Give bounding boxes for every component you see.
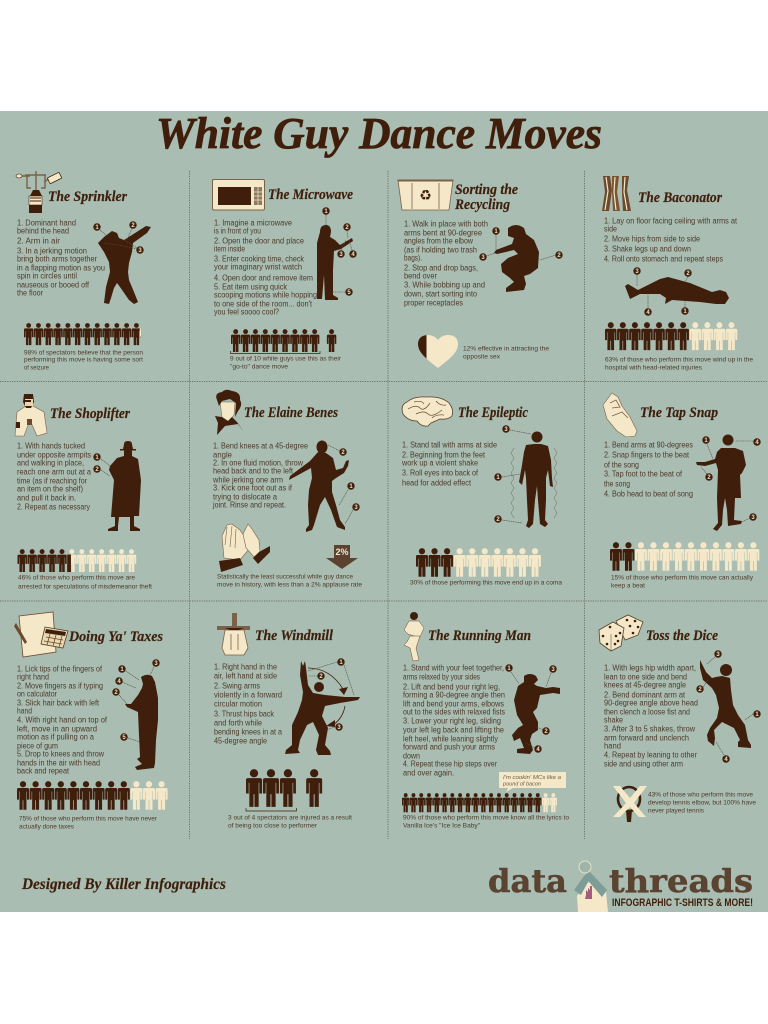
figure: sprinkler dancer: 2 bbox=[131, 223, 135, 229]
steps: lean to one side and bend bbox=[604, 672, 687, 682]
steps: is in front of you bbox=[214, 226, 261, 236]
panel: the running man bbox=[402, 612, 569, 830]
figure: running dancer: 3 bbox=[551, 667, 555, 673]
figure: elaine dancer: 2 bbox=[341, 450, 345, 456]
steps bbox=[214, 218, 317, 316]
panel: the elaine benes bbox=[212, 390, 362, 588]
icon: elaine portrait bbox=[215, 390, 244, 435]
stat text: "go-to" dance move bbox=[230, 364, 288, 370]
stat text: of seizure bbox=[24, 364, 49, 372]
stat text: 30% of those performing this move end up in a coma bbox=[410, 580, 562, 586]
figure: taxes dancer: 3 bbox=[154, 661, 158, 667]
steps: 1. Dominant hand bbox=[17, 218, 76, 228]
steps: head for added effect bbox=[402, 478, 472, 488]
stat text: hospital with head-related injuries bbox=[605, 364, 703, 372]
steps: (as if holding two trash bbox=[404, 246, 477, 254]
title: White Guy Dance Moves bbox=[156, 109, 602, 158]
figure: lying dancer: 3 bbox=[635, 269, 639, 275]
stat text: 63% of those who perform this move wind up in the bbox=[605, 356, 753, 364]
figure: squatting dancer: 2 bbox=[557, 253, 561, 259]
figure: shaking dancer: 1 bbox=[496, 475, 500, 481]
heading: The Sprinkler bbox=[48, 189, 127, 205]
steps: 1. Walk in place with both bbox=[404, 220, 488, 228]
panel: the tap snap bbox=[603, 393, 761, 590]
heading: The Epileptic bbox=[458, 405, 528, 421]
stat text: 9 out of 10 white guys use this as their bbox=[230, 356, 342, 362]
heading: The Elaine Benes bbox=[244, 405, 338, 421]
figure: tap snap dancer: 2 bbox=[707, 475, 711, 481]
heading: The Shoplifter bbox=[50, 406, 130, 422]
steps: left, move in an upward bbox=[17, 724, 97, 734]
speech bubble: I'm cookin' MCs like a bbox=[503, 775, 562, 781]
steps bbox=[404, 220, 488, 308]
steps: the floor bbox=[17, 288, 43, 298]
steps: 2. Bend dominant arm at bbox=[604, 690, 686, 700]
figure: windmill dancer: 2 bbox=[319, 674, 323, 680]
figure: taxes dancer: 5 bbox=[122, 735, 126, 741]
steps: on calculator bbox=[17, 690, 57, 698]
figure: microwave dancer: 5 bbox=[347, 290, 351, 296]
figure: squatting dancer: 1 bbox=[494, 229, 498, 235]
figure: squatting dancer bbox=[479, 225, 563, 292]
steps: 2. Lift and bend your right leg, bbox=[403, 682, 500, 692]
steps: 1. With hands tucked bbox=[17, 442, 85, 450]
figure: sprinkler dancer bbox=[93, 221, 151, 304]
icon: bacon bbox=[602, 176, 631, 211]
steps: 3. Enter cooking time, check bbox=[214, 254, 305, 264]
steps: and pull it back in. bbox=[17, 494, 76, 502]
figure: microwave dancer bbox=[317, 207, 357, 300]
figure: sprinkler dancer: 3 bbox=[138, 248, 142, 254]
icon: running man bbox=[404, 612, 424, 661]
pictogram: 98 percent bbox=[24, 323, 141, 345]
steps: 3. In a jerking motion bbox=[17, 246, 87, 256]
figure: running dancer bbox=[505, 664, 560, 754]
steps: angles from the elbow bbox=[404, 236, 473, 246]
steps: 2. In one fluid motion, throw bbox=[213, 458, 303, 468]
steps: hand bbox=[17, 706, 32, 716]
steps: 5. Drop to knees and throw bbox=[17, 750, 104, 758]
steps: knees at 45-degree angle bbox=[604, 680, 686, 690]
steps: 2. Repeat as necessary bbox=[17, 502, 90, 512]
stat text bbox=[217, 574, 362, 588]
steps bbox=[214, 662, 282, 746]
icon: tax papers and calculator bbox=[14, 612, 68, 657]
figure: tap snap dancer: 3 bbox=[751, 515, 755, 521]
grid dividers bbox=[0, 171, 768, 839]
figure: tap snap dancer bbox=[696, 434, 761, 531]
steps: the song bbox=[604, 480, 630, 488]
steps: 2. Move hips from side to side bbox=[604, 234, 700, 244]
figure: lying dancer: 4 bbox=[646, 310, 650, 316]
steps: arms relaxed by your sides bbox=[403, 672, 480, 682]
steps: you feel soooo cool? bbox=[214, 308, 279, 316]
figure: taxes dancer: 2 bbox=[114, 690, 118, 696]
stat text: 98% of spectators believe that the person bbox=[24, 350, 143, 356]
steps: 4. With right hand on top of bbox=[17, 716, 108, 724]
steps: shake bbox=[604, 716, 623, 724]
steps: piece of gum bbox=[17, 742, 58, 750]
figure: elaine dancer: 3 bbox=[354, 505, 358, 511]
steps: 3. After 3 to 5 shakes, throw bbox=[604, 724, 695, 734]
stat text: develop tennis elbow, but 100% have bbox=[648, 800, 756, 806]
figure: dice dancer: 1 bbox=[755, 712, 759, 718]
stat text: 15% of those who perform this move can actually bbox=[611, 574, 754, 582]
figure: running dancer: 1 bbox=[507, 666, 511, 672]
steps: 1. Stand tall with arms at side bbox=[402, 440, 497, 450]
panel: the epileptic bbox=[401, 397, 562, 586]
stat text bbox=[19, 816, 158, 830]
stat text bbox=[230, 356, 342, 370]
steps: 1. Bend arms at 90-degrees bbox=[604, 440, 693, 450]
speech bubble bbox=[499, 772, 566, 792]
heading: The Running Man bbox=[428, 628, 531, 644]
icon: brain bbox=[402, 397, 453, 426]
figure: elaine dancer: 1 bbox=[349, 484, 353, 490]
pictogram: 46 percent bbox=[18, 549, 136, 572]
heading: Toss the Dice bbox=[646, 628, 718, 644]
figure: trench coat dancer: 1 bbox=[95, 455, 99, 461]
footer credit: Designed By Killer Infographics bbox=[21, 876, 226, 893]
stat text bbox=[403, 814, 569, 830]
steps: time (as if reaching for bbox=[17, 476, 87, 486]
stat text: keep a beat bbox=[611, 582, 645, 590]
pictogram: 15 percent bbox=[610, 542, 759, 571]
figure: taxes dancer: 4 bbox=[117, 679, 121, 685]
steps: 1. Imagine a microwave bbox=[214, 218, 293, 228]
stat text bbox=[605, 356, 753, 372]
stat text: performing this move is having some sort bbox=[24, 356, 143, 364]
steps: 4. Repeat these hip steps over bbox=[403, 760, 497, 768]
steps: joint. Rinse and repeat. bbox=[212, 500, 286, 510]
steps: hand bbox=[604, 742, 621, 750]
figure: tap snap dancer: 4 bbox=[755, 440, 759, 446]
panel: the windmill bbox=[214, 613, 360, 830]
steps: then clench a loose fist and bbox=[604, 708, 690, 716]
steps: 2. Beginning from the feet bbox=[402, 450, 486, 460]
heading: The Tap Snap bbox=[640, 405, 718, 421]
figure: squatting dancer: 3 bbox=[481, 255, 485, 261]
steps: proper receptacles bbox=[404, 298, 463, 308]
steps: arms bent at 90-degree bbox=[404, 228, 483, 238]
figure: dice dancer: 2 bbox=[698, 687, 702, 693]
icon: clapping hands bbox=[219, 524, 270, 572]
steps: in a flapping motion as you bbox=[17, 264, 105, 272]
steps: spin in circles until bbox=[17, 272, 77, 280]
stat text: 46% of those who perform this move are bbox=[18, 574, 135, 582]
steps bbox=[401, 440, 497, 488]
steps: 4. Open door and remove item bbox=[214, 274, 313, 282]
logo word: data: data bbox=[488, 862, 567, 900]
steps: side bbox=[604, 224, 617, 234]
steps: your imaginary wrist watch bbox=[214, 262, 302, 272]
heading: The Windmill bbox=[255, 628, 334, 644]
stat text: 75% of those who perform this move have never bbox=[19, 816, 158, 822]
steps: 2. Swing arms bbox=[214, 682, 260, 690]
steps: side and using other arm bbox=[604, 760, 683, 768]
icon: snapping hand bbox=[603, 393, 637, 437]
stat text bbox=[228, 814, 352, 830]
figure: windmill dancer: 1 bbox=[339, 660, 343, 666]
figure: trench coat dancer bbox=[93, 441, 141, 531]
stat text bbox=[648, 792, 756, 814]
figure: microwave dancer: 4 bbox=[351, 252, 355, 258]
steps: behind the head bbox=[17, 226, 69, 236]
logo word: threads: threads bbox=[609, 862, 753, 900]
steps: reach one arm out at a bbox=[17, 468, 91, 476]
pictogram: 90 percent bbox=[402, 793, 557, 812]
panel: sorting the recycling bbox=[398, 180, 563, 368]
figure: dice dancer: 4 bbox=[724, 757, 728, 763]
steps: and forth while bbox=[214, 718, 263, 728]
steps: air, left hand at side bbox=[214, 672, 277, 680]
stat text: of being too close to performer bbox=[228, 822, 318, 830]
stat text: arrested for speculations of misdemeanor theft bbox=[18, 584, 152, 590]
steps: and walking in place, bbox=[17, 458, 84, 468]
steps: 5. Eat item using quick bbox=[214, 282, 288, 292]
panel: the sprinkler bbox=[16, 171, 151, 372]
steps: angle bbox=[213, 450, 233, 460]
icon: 2 percent arrow: 2% bbox=[335, 547, 349, 557]
icon: 2 percent arrow bbox=[326, 545, 358, 569]
steps: to one side of the room... don't bbox=[214, 300, 313, 308]
heading: Sorting the bbox=[455, 182, 518, 198]
steps: 3. Lower your right leg, sliding bbox=[403, 716, 501, 726]
figure: elaine dancer bbox=[289, 440, 360, 532]
figure: dice dancer bbox=[696, 650, 761, 763]
steps bbox=[604, 440, 693, 498]
pictogram: 63 percent bbox=[605, 322, 737, 350]
steps: forming a 90-degree angle then bbox=[403, 690, 505, 700]
stat text: 43% of those who perform this move bbox=[648, 792, 753, 798]
heading: Doing Ya' Taxes bbox=[68, 629, 163, 645]
steps: back and repeat bbox=[17, 766, 70, 776]
stat text bbox=[463, 346, 549, 360]
steps: 1. Lay on floor facing ceiling with arms at bbox=[604, 216, 738, 226]
steps: 2. Move fingers as if typing bbox=[17, 682, 103, 690]
steps: arm forward and unclench bbox=[604, 734, 689, 742]
stat text: move in history, with less than a 2% applause rate bbox=[217, 582, 362, 588]
steps: 4. Roll onto stomach and repeat steps bbox=[604, 254, 723, 264]
logo: data threads bbox=[488, 861, 753, 912]
steps bbox=[403, 664, 505, 778]
panel: doing ya taxes bbox=[14, 612, 168, 830]
steps: head back and to the left bbox=[213, 466, 294, 476]
steps bbox=[17, 218, 105, 298]
figure: windmill dancer: 3 bbox=[337, 725, 341, 731]
steps bbox=[604, 216, 738, 264]
icon: man in coat bbox=[15, 394, 47, 436]
steps: 3. Shake legs up and down bbox=[604, 244, 691, 254]
figure: lying dancer: 1 bbox=[683, 309, 687, 315]
steps: and over again. bbox=[403, 768, 454, 778]
icon: crossed out tennis racket bbox=[613, 786, 647, 822]
stat text: opposite sex bbox=[463, 354, 501, 360]
stat text: Vanilla Ice's "Ice Ice Baby" bbox=[403, 822, 481, 830]
steps: 3. Slick hair back with left bbox=[17, 698, 100, 708]
steps: left heel, while leaning slightly bbox=[403, 734, 498, 744]
steps: 3. Kick one foot out as if bbox=[213, 484, 293, 492]
steps: 45-degree angle bbox=[214, 736, 267, 746]
speech bubble: pound of bacon bbox=[502, 782, 541, 788]
steps: 90-degree angle above head bbox=[604, 698, 698, 708]
heading: The Baconator bbox=[638, 190, 722, 206]
steps: 1. Right hand in the bbox=[214, 662, 277, 672]
steps: your left leg back and lifting the bbox=[403, 726, 504, 734]
steps: 3. Roll eyes into back of bbox=[402, 468, 479, 478]
steps: work up a violent shake bbox=[401, 458, 478, 468]
icon: recycling bin: ♻ bbox=[419, 188, 432, 204]
steps: 1. Bend knees at a 45-degree bbox=[213, 442, 308, 450]
steps: 3. Tap foot to the beat of bbox=[604, 470, 683, 478]
panel: the shoplifter bbox=[15, 394, 152, 590]
steps bbox=[17, 442, 91, 512]
steps: down, start sorting into bbox=[404, 290, 477, 298]
icon: sprinkler bbox=[16, 171, 62, 213]
steps: right hand bbox=[17, 672, 49, 682]
panel: sorting the recycling: Recycling bbox=[454, 197, 510, 213]
pictogram: 75 percent bbox=[17, 781, 168, 810]
steps: bring both arms together bbox=[17, 254, 97, 264]
figure: lying dancer bbox=[625, 267, 729, 316]
figure: dice dancer: 3 bbox=[716, 652, 720, 658]
figure: taxes dancer: 1 bbox=[120, 667, 124, 673]
stat text bbox=[18, 574, 152, 590]
steps: 3. While bobbing up and bbox=[404, 280, 485, 290]
pictogram: 30 percent bbox=[416, 548, 541, 577]
steps: 1. Stand with your feet together, bbox=[403, 664, 504, 672]
figure: tap snap dancer: 1 bbox=[704, 438, 708, 444]
stat text: 12% effective in attracting the bbox=[463, 346, 549, 352]
steps: 1. Lick tips of the fingers of bbox=[17, 664, 103, 674]
steps: 2. Arm in air bbox=[17, 236, 60, 246]
figure: shaking dancer: 3 bbox=[504, 427, 508, 433]
figure: trench coat dancer: 2 bbox=[95, 467, 99, 473]
steps: bags). bbox=[404, 254, 422, 262]
steps: violently in a forward bbox=[214, 690, 282, 700]
panel: toss the dice bbox=[599, 615, 761, 822]
steps: while jerking one arm bbox=[212, 476, 283, 484]
steps bbox=[604, 664, 698, 768]
steps bbox=[212, 442, 308, 510]
steps: down bbox=[403, 752, 420, 760]
steps: 2. Snap fingers to the beat bbox=[604, 450, 690, 460]
figure: windmill dancer bbox=[285, 658, 360, 755]
pictogram: 3 out of 4 bbox=[246, 769, 322, 807]
stat text: actually done taxes bbox=[19, 824, 75, 830]
icon: microwave bbox=[212, 180, 264, 210]
background panel bbox=[0, 111, 768, 912]
steps: 2. Open the door and place bbox=[214, 236, 305, 246]
figure: running dancer: 2 bbox=[544, 729, 548, 735]
panel: the microwave bbox=[212, 180, 357, 370]
figure: taxes dancer bbox=[112, 659, 160, 770]
stat text: never played tennis bbox=[648, 808, 705, 814]
figure: shaking dancer bbox=[494, 425, 557, 528]
stat text: 90% of those who perform this move know all the lyrics to bbox=[403, 814, 569, 822]
steps: nauseous or booed off bbox=[17, 280, 90, 290]
steps: hands in the air with head bbox=[17, 758, 100, 768]
steps: 1. With legs hip width apart, bbox=[604, 664, 696, 672]
steps: item inside bbox=[214, 244, 245, 254]
icon: heart 12 percent bbox=[418, 335, 458, 368]
steps: an item on the shelf) bbox=[17, 484, 83, 494]
stat text bbox=[24, 350, 143, 372]
steps: 3. Thrust hips back bbox=[214, 710, 275, 718]
steps: lift and bend your arms, elbows bbox=[403, 700, 504, 708]
figure: lying dancer: 2 bbox=[686, 271, 690, 277]
icon: recycling bin bbox=[398, 180, 454, 210]
heading: The Microwave bbox=[268, 187, 353, 203]
figure: microwave dancer: 1 bbox=[324, 209, 328, 215]
steps: under opposite armpits bbox=[17, 450, 91, 460]
figure: running dancer: 4 bbox=[536, 747, 540, 753]
steps: motion as if pulling on a bbox=[17, 732, 94, 742]
icon: windmill bbox=[217, 613, 250, 655]
steps: circular motion bbox=[214, 700, 262, 708]
steps: 2. Stop and drop bags, bbox=[404, 264, 478, 272]
figure: shaking dancer: 2 bbox=[496, 517, 500, 523]
stat text: Statistically the least successful white guy dance bbox=[217, 574, 353, 580]
steps: trying to dislocate a bbox=[213, 492, 278, 502]
steps: forward and push your arms bbox=[403, 742, 495, 752]
figure: microwave dancer: 3 bbox=[339, 252, 343, 258]
stat text bbox=[611, 574, 754, 590]
steps: 4. Bob head to beat of song bbox=[604, 490, 693, 498]
steps: bend over bbox=[404, 272, 437, 280]
figure: t-shirt model bbox=[574, 861, 608, 912]
stat text: 3 out of 4 spectators are injured as a result bbox=[228, 814, 352, 822]
icon: dice bbox=[599, 615, 643, 651]
panel: the baconator bbox=[602, 176, 753, 372]
figure: sprinkler dancer: 1 bbox=[95, 225, 99, 231]
steps: bending knees in at a bbox=[214, 728, 282, 736]
steps: out to the sides with relaxed fists bbox=[403, 708, 505, 716]
steps: 4. Repeat by leaning to other bbox=[604, 750, 697, 760]
pictogram: 9 out of 10 bbox=[231, 329, 336, 352]
steps bbox=[17, 664, 108, 776]
steps: scooping motions while hopping bbox=[214, 290, 317, 300]
figure: microwave dancer: 2 bbox=[345, 225, 349, 231]
steps: of the song bbox=[604, 460, 639, 470]
